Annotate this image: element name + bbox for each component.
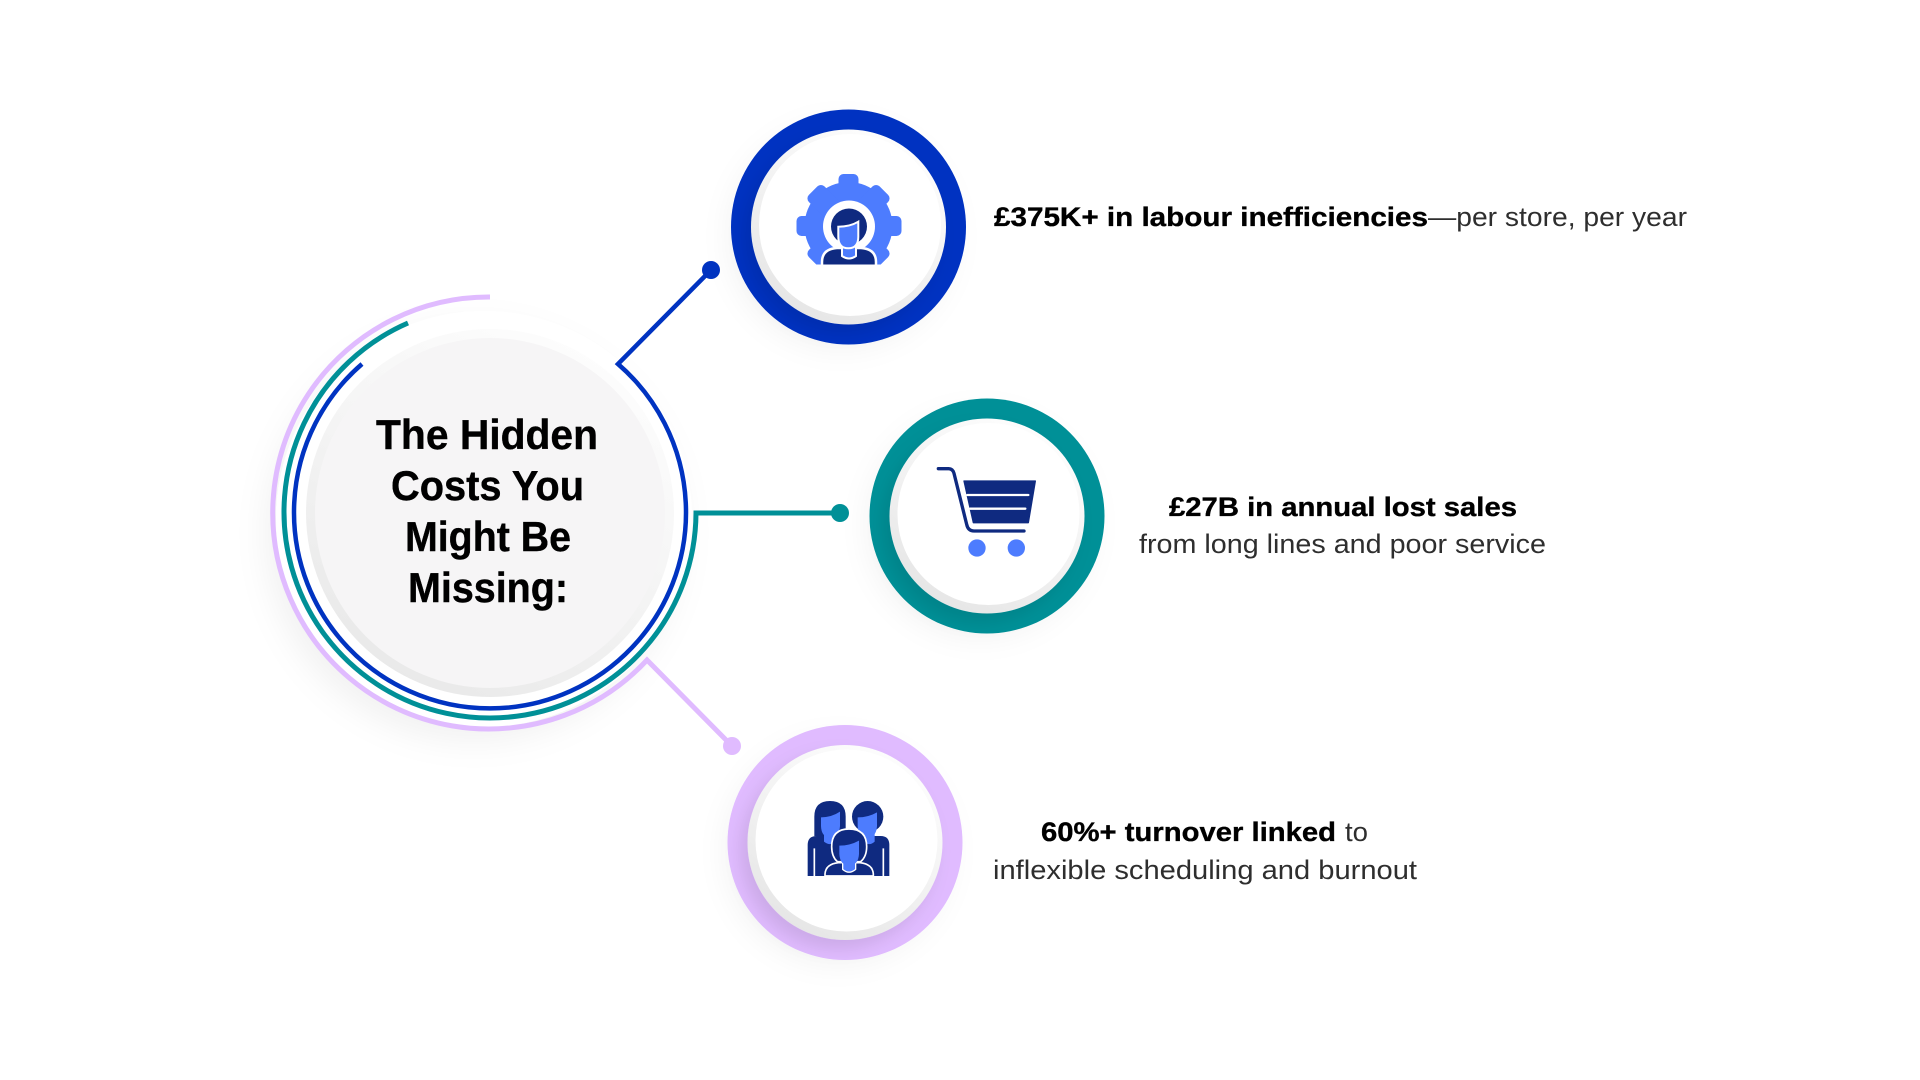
icon: shopping cart xyxy=(938,469,1035,557)
connector: purple arc to third item xyxy=(273,297,741,755)
heading: The Hidden xyxy=(376,411,598,458)
item 2 text xyxy=(1139,492,1546,559)
item 3 text xyxy=(993,817,1418,885)
heading: Might Be xyxy=(405,513,571,560)
item 2 ring: lost sales xyxy=(870,398,1104,634)
item 2 text: from long lines and poor service xyxy=(1139,529,1546,559)
item 3 text: inflexible scheduling and burnout xyxy=(993,855,1418,885)
item 3 text: to xyxy=(1345,817,1368,847)
item 1 text xyxy=(994,202,1687,232)
item 1 text: £375K+ in labour inefficiencies xyxy=(994,202,1428,232)
infographic canvas xyxy=(270,110,1687,960)
icon: group of people xyxy=(808,801,889,876)
item 3 text: 60%+ turnover linked xyxy=(1041,817,1336,847)
connector: blue arc to first item xyxy=(294,261,720,708)
heading: Costs You xyxy=(391,462,584,509)
heading: Missing: xyxy=(408,564,568,611)
item 1 text: —per store, per year xyxy=(1428,202,1687,232)
item 2 text: £27B in annual lost sales xyxy=(1169,492,1517,522)
heading xyxy=(376,411,598,611)
icon: gear with person xyxy=(796,174,902,264)
panel: central circle xyxy=(276,311,692,727)
connector: teal arc to second item xyxy=(284,323,849,718)
item 1 ring: labour xyxy=(731,110,966,344)
item 3 ring: turnover xyxy=(728,725,962,960)
